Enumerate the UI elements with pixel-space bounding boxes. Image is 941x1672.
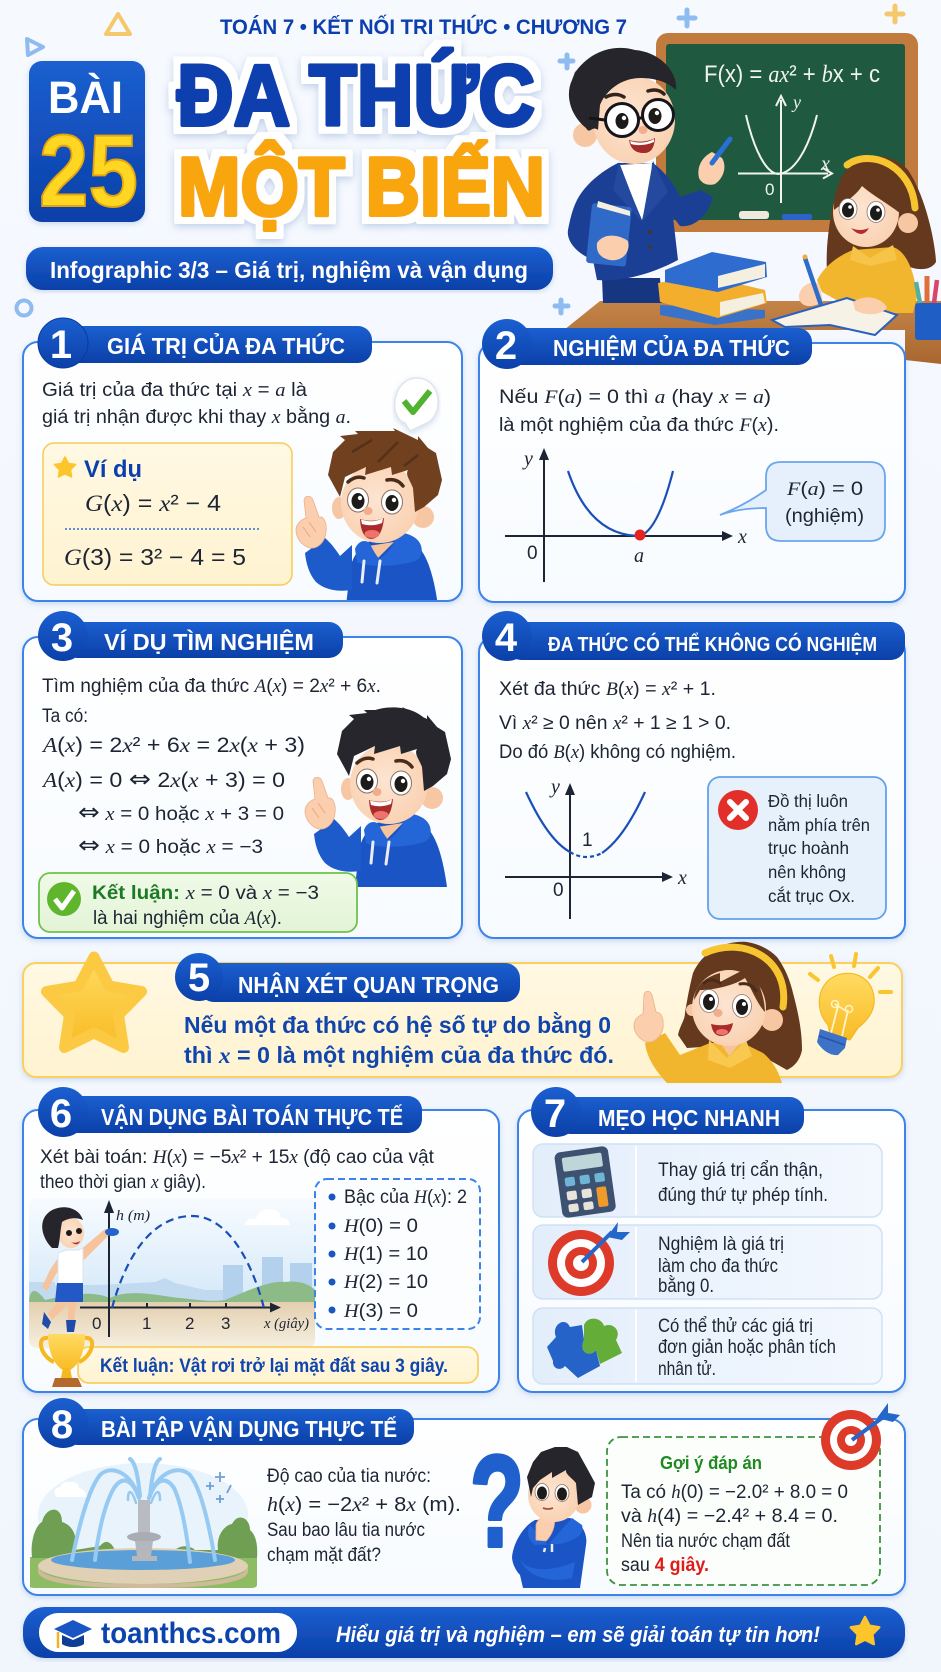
chalkboard: y bbox=[791, 92, 801, 112]
heading 2: NGHIỆM CỦA ĐA THỨC bbox=[553, 333, 790, 361]
teacher character bbox=[568, 48, 730, 303]
lesson badge: 25 bbox=[39, 114, 138, 228]
icon: target bbox=[548, 1222, 630, 1296]
answer hint box: Ta có h(0) = −2.0² + 8.0 = 0 bbox=[621, 1482, 848, 1503]
heading 3: VÍ DỤ TÌM NGHIỆM bbox=[104, 628, 314, 655]
heading 5: NHẬN XÉT QUAN TRỌNG bbox=[238, 971, 499, 998]
tip 1: đúng thứ tự phép tính. bbox=[658, 1185, 828, 1206]
example box: G(3) = 3² − 4 = 5 bbox=[64, 544, 246, 570]
value list dashed box: H(2) = 10 bbox=[343, 1272, 428, 1293]
note box: Đồ thị luôn bbox=[768, 791, 848, 811]
worked solution: A(x) = 0 ⇔ 2x(x + 3) = 0 bbox=[41, 765, 285, 793]
problem text: Xét bài toán: H(x) = −5x² + 15x (độ cao của vật bbox=[40, 1147, 435, 1168]
note box: trục hoành bbox=[768, 838, 849, 858]
remark text bbox=[184, 1011, 614, 1068]
callout F(a)=0: (nghiệm) bbox=[785, 506, 864, 527]
lesson badge bbox=[29, 61, 145, 228]
desk bbox=[564, 301, 941, 364]
subtitle bar: Infographic 3/3 – Giá trị, nghiệm và vận dụng bbox=[50, 257, 528, 283]
graph with no root bbox=[505, 776, 687, 919]
root definition: là một nghiệm của đa thức F(x). bbox=[499, 415, 779, 436]
tip 1: Thay giá trị cẩn thận, bbox=[658, 1160, 823, 1181]
worked solution: A(x) = 2x² + 6x = 2x(x + 3) bbox=[41, 733, 305, 757]
throw scene and chart: 2 bbox=[185, 1314, 194, 1333]
tip 1 bbox=[533, 1144, 882, 1218]
heading 7: 7 bbox=[544, 1092, 566, 1136]
throw scene and chart: 3 bbox=[221, 1314, 230, 1333]
note box: cắt trục Ox. bbox=[768, 885, 855, 906]
girl at the desk bbox=[772, 156, 941, 340]
panel: 2 root of polynomial bbox=[479, 319, 905, 602]
target icon bbox=[821, 1403, 900, 1470]
note box: nằm phía trên bbox=[768, 814, 870, 835]
value list dashed box bbox=[315, 1179, 480, 1329]
tip 2 bbox=[533, 1222, 882, 1299]
argument text: Do đó B(x) không có nghiệm. bbox=[499, 742, 736, 763]
callout F(a)=0: F(a) = 0 bbox=[786, 479, 863, 500]
answer hint box: sau 4 giây. bbox=[621, 1555, 709, 1576]
exercise text bbox=[267, 1466, 461, 1566]
tip 3 bbox=[533, 1308, 882, 1384]
exercise text: Độ cao của tia nước: bbox=[267, 1466, 431, 1487]
main title bbox=[177, 48, 545, 233]
argument text: Xét đa thức B(x) = x² + 1. bbox=[499, 679, 716, 700]
root graph bbox=[505, 448, 747, 582]
heading 4 bbox=[482, 611, 905, 661]
throw scene and chart: x (giây) bbox=[263, 1316, 309, 1332]
check speech bubble bbox=[395, 378, 438, 431]
tip 2: làm cho đa thức bbox=[658, 1256, 778, 1277]
tip 2: bằng 0. bbox=[658, 1275, 714, 1297]
conclusion box: là hai nghiệm của A(x). bbox=[93, 908, 282, 929]
main title: MỘT BIẾN bbox=[178, 140, 545, 233]
boy pointing bbox=[296, 428, 442, 606]
root graph: 0 bbox=[527, 543, 538, 564]
panel: 7 quick study tips bbox=[518, 1087, 905, 1392]
stack of books bbox=[658, 252, 767, 325]
root graph: x bbox=[737, 526, 747, 548]
callout F(a)=0 bbox=[720, 462, 885, 541]
note box bbox=[708, 777, 886, 919]
root graph: y bbox=[522, 448, 533, 470]
boy throwing bbox=[42, 1207, 119, 1332]
logo pill: toanthcs.com bbox=[101, 1617, 281, 1650]
value list dashed box: H(3) = 0 bbox=[343, 1301, 418, 1322]
subject line: TOÁN 7 • KẾT NỐI TRI THỨC • CHƯƠNG 7 bbox=[220, 15, 627, 39]
tagline: Hiểu giá trị và nghiệm – em sẽ giải toán tự tin hơn! bbox=[336, 1622, 820, 1647]
light bulb icon bbox=[810, 954, 891, 1055]
chalkboard: x bbox=[820, 153, 830, 175]
root graph: a bbox=[634, 545, 644, 567]
fountain illustration bbox=[30, 1459, 257, 1588]
graph with no root: y bbox=[549, 776, 560, 798]
girl pointing bbox=[634, 942, 802, 1083]
panel: 8 practice exercise bbox=[23, 1398, 905, 1595]
problem text: theo thời gian x giây). bbox=[40, 1172, 206, 1193]
conclusion bar: Kết luận: Vật rơi trở lại mặt đất sau 3 giây. bbox=[100, 1356, 448, 1377]
throw scene and chart bbox=[29, 1198, 315, 1348]
worked solution bbox=[41, 676, 381, 859]
logo pill bbox=[39, 1613, 297, 1652]
value list dashed box: H(1) = 10 bbox=[343, 1244, 428, 1265]
worked solution: Ta có: bbox=[42, 706, 88, 727]
lesson label: BÀI bbox=[48, 72, 123, 123]
main title: ĐA THỨC bbox=[177, 48, 535, 144]
panel: 6 real-world application bbox=[23, 1087, 499, 1392]
conclusion box: Kết luận: x = 0 và x = −3 bbox=[92, 883, 319, 904]
heading 2 bbox=[482, 319, 812, 369]
heading 2: 2 bbox=[495, 324, 517, 368]
tip 2: Nghiệm là giá trị bbox=[658, 1234, 784, 1255]
remark text: thì x = 0 là một nghiệm của đa thức đó. bbox=[184, 1042, 614, 1068]
heading 8: BÀI TẬP VẬN DỤNG THỰC TẾ bbox=[101, 1415, 397, 1442]
worked solution: ⇔ x = 0 hoặc x + 3 = 0 bbox=[78, 798, 284, 826]
answer hint box bbox=[607, 1437, 880, 1585]
graph with no root: 1 bbox=[582, 830, 593, 851]
remark text: Nếu một đa thức có hệ số tự do bằng 0 bbox=[184, 1011, 611, 1038]
big star icon bbox=[46, 957, 141, 1048]
note box: nên không bbox=[768, 862, 846, 882]
icon: calculator bbox=[554, 1146, 616, 1218]
value list dashed box: Bậc của H(x): 2 bbox=[344, 1187, 467, 1208]
tip 3: đơn giản hoặc phân tích bbox=[658, 1337, 836, 1358]
heading 5: 5 bbox=[188, 956, 210, 1000]
heading 7: MẸO HỌC NHANH bbox=[598, 1105, 780, 1131]
tip 3: Có thể thử các giá trị bbox=[658, 1316, 813, 1337]
argument text: Vì x² ≥ 0 nên x² + 1 ≥ 1 > 0. bbox=[499, 713, 731, 734]
definition text: Giá trị của đa thức tại x = a là bbox=[42, 380, 307, 401]
conclusion bar bbox=[78, 1347, 478, 1383]
panel: 1 value of polynomial bbox=[23, 318, 462, 606]
icon: footer star bbox=[851, 1617, 879, 1644]
trophy icon bbox=[41, 1334, 92, 1387]
decorative geometric shapes bbox=[16, 6, 903, 316]
root definition: Nếu F(a) = 0 thì a (hay x = a) bbox=[499, 387, 771, 408]
example box bbox=[43, 443, 292, 585]
heading 3: 3 bbox=[51, 616, 73, 660]
graph with no root: 0 bbox=[553, 880, 564, 901]
worked solution: Tìm nghiệm của đa thức A(x) = 2x² + 6x. bbox=[42, 676, 381, 697]
boy thinking bbox=[512, 1447, 595, 1588]
exercise text: Sau bao lâu tia nước bbox=[267, 1520, 425, 1541]
question mark icon: ? bbox=[470, 1428, 524, 1574]
subtitle bar bbox=[26, 247, 553, 290]
worked solution: ⇔ x = 0 hoặc x = −3 bbox=[78, 831, 263, 859]
value list dashed box: H(0) = 0 bbox=[343, 1216, 418, 1237]
heading 4: 4 bbox=[495, 616, 518, 660]
problem text bbox=[40, 1147, 435, 1193]
throw scene and chart: h (m) bbox=[116, 1208, 150, 1224]
answer hint box: Nên tia nước chạm đất bbox=[621, 1531, 791, 1552]
answer hint box: Gợi ý đáp án bbox=[660, 1452, 762, 1473]
heading 8: 8 bbox=[51, 1403, 73, 1447]
exercise text: h(x) = −2x² + 8x (m). bbox=[267, 1494, 461, 1516]
example box: Ví dụ bbox=[84, 456, 142, 483]
throw scene and chart: 1 bbox=[142, 1314, 151, 1333]
heading 7 bbox=[531, 1087, 804, 1137]
chalkboard bbox=[656, 33, 918, 232]
icon: graduation cap bbox=[54, 1620, 92, 1648]
footer bar bbox=[23, 1607, 905, 1658]
definition text bbox=[42, 380, 351, 428]
tip 3: nhân tử. bbox=[658, 1359, 716, 1380]
panel: 4 no roots bbox=[479, 611, 905, 938]
icon: puzzle bbox=[547, 1319, 622, 1378]
argument text bbox=[499, 679, 736, 763]
heading 6 bbox=[38, 1087, 422, 1137]
heading 6: 6 bbox=[50, 1092, 72, 1136]
conclusion box bbox=[39, 873, 357, 932]
throw scene and chart: 0 bbox=[92, 1314, 101, 1333]
boy pointing black hair bbox=[305, 707, 451, 887]
graph with no root: x bbox=[677, 867, 687, 889]
example box: G(x) = x² − 4 bbox=[85, 490, 221, 516]
heading 1: 1 bbox=[50, 323, 72, 367]
heading 1: GIÁ TRỊ CỦA ĐA THỨC bbox=[107, 331, 345, 359]
definition text: giá trị nhận được khi thay x bằng a. bbox=[42, 406, 351, 428]
heading 5 bbox=[175, 953, 520, 1002]
heading 6: VẬN DỤNG BÀI TOÁN THỰC TẾ bbox=[101, 1103, 403, 1130]
chalkboard: F(x) = ax² + bx + c bbox=[704, 61, 880, 88]
panel: 5 key remark bbox=[23, 942, 902, 1083]
heading 8 bbox=[38, 1398, 414, 1448]
exercise text: chạm mặt đất? bbox=[267, 1545, 381, 1566]
heading 4: ĐA THỨC CÓ THỂ KHÔNG CÓ NGHIỆM bbox=[548, 632, 877, 656]
root definition bbox=[499, 387, 779, 436]
answer hint box: và h(4) = −2.4² + 8.4 = 0. bbox=[621, 1506, 838, 1527]
panel: 3 finding roots bbox=[23, 611, 462, 938]
heading 1 bbox=[38, 318, 372, 368]
chalkboard: 0 bbox=[765, 180, 774, 199]
heading 3 bbox=[38, 611, 343, 661]
